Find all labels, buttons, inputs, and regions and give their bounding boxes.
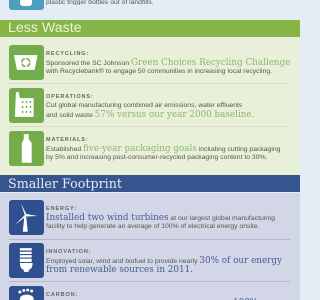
heading: Less Waste: Less Waste [8, 20, 82, 36]
text: operations: OPERATIONS: [46, 94, 94, 100]
text: innovation [46, 249, 282, 275]
text: operations [46, 94, 254, 120]
text: materials: Established five-year packaging goals including cutting packaging [46, 144, 280, 154]
text: innovation: Employed solar, wind and biofuel to provide nearly 30% of our energy [46, 256, 282, 266]
icon: footprint [9, 286, 44, 300]
text: recycling: with Recyclebank® to engage 50 communities in increasing local recycling. [46, 68, 272, 75]
panel: smaller footprint [0, 193, 300, 300]
icon: bottle [9, 131, 44, 166]
text: operations: and solid waste 57% versus our year 2000 baseline. [46, 110, 254, 120]
icon: light bulb [9, 243, 44, 278]
text: recycling: Sponsored the SC Johnson Green Choices Recycling Challenge [46, 58, 290, 68]
text: materials: MATERIALS: [46, 136, 89, 142]
text: materials: by 5% and increasing post-consumer-recycled packaging content to 30%. [46, 154, 267, 160]
text: operations: Cut global manufacturing combined air emissions, water effluents [46, 102, 242, 109]
text: recycling [46, 51, 290, 75]
text: energy: Installed two wind turbines at our largest global manufacturing [46, 213, 275, 223]
icon: trigger bottle [9, 0, 44, 10]
text: innovation: INNOVATION: [46, 249, 91, 255]
heading: Less Waste [0, 20, 300, 37]
panel: top remainder [0, 0, 300, 20]
text: energy: facility to help generate an average of 100% of electrical energy onsite. [46, 223, 259, 230]
text: innovation: from renewable sources in 2011. [46, 265, 193, 275]
icon: recycling bin [9, 45, 44, 80]
text: carbon: CARBON: [46, 292, 78, 298]
icon: factory [9, 88, 44, 123]
text: recycling: RECYCLING: [46, 51, 89, 57]
panel: less waste [0, 38, 300, 175]
text: energy: ENERGY: [46, 206, 77, 212]
text: materials [46, 136, 280, 160]
text: carbon [46, 292, 258, 300]
heading: Smaller Footprint: Smaller Footprint [8, 176, 122, 191]
text: energy [46, 206, 275, 230]
icon: wind turbine [9, 200, 44, 235]
heading: Smaller Footprint [0, 175, 300, 192]
